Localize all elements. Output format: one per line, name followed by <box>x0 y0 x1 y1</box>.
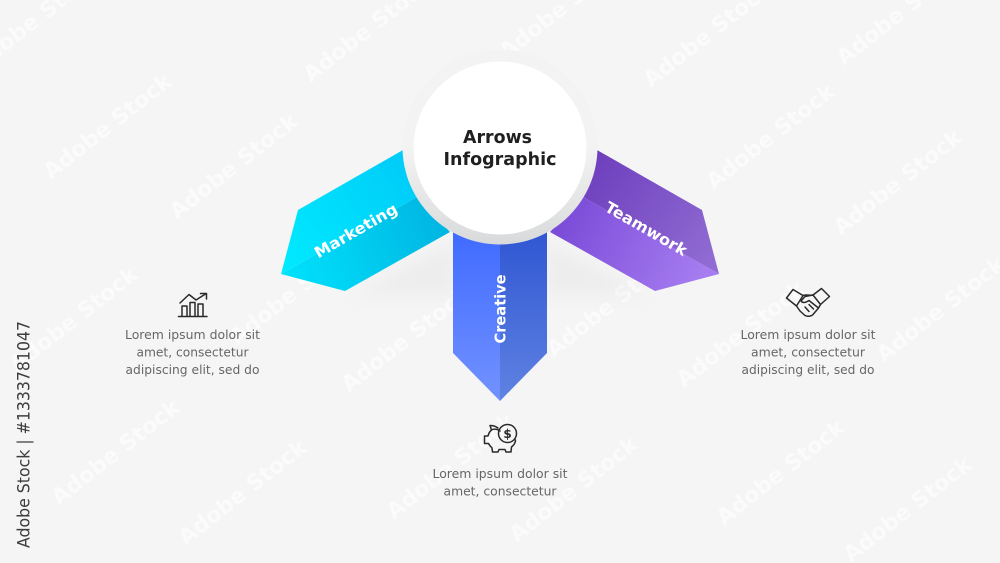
text: Marketing description <box>125 328 260 377</box>
text: Teamwork description: Lorem ipsum dolor sit <box>740 328 876 342</box>
watermark pattern: Adobe Stock <box>5 261 144 378</box>
watermark pattern: Adobe Stock <box>165 108 304 225</box>
icon: handshake <box>786 288 830 316</box>
watermark pattern: Adobe Stock <box>39 68 178 185</box>
text: Teamwork description: adipiscing elit, sed do <box>742 363 874 377</box>
watermark pattern: Adobe Stock <box>382 408 521 525</box>
watermark pattern: Adobe Stock <box>337 281 476 398</box>
label: Marketing: Marketing <box>311 200 401 262</box>
text: Teamwork description: amet, consectetur <box>751 346 865 360</box>
stock id label: Adobe Stock | #1333781047 <box>14 321 34 548</box>
arrow: Teamwork <box>550 150 719 291</box>
arrow shadows <box>350 240 650 296</box>
text: Creative description: amet, consectetur <box>444 484 557 498</box>
arrow: Creative <box>453 225 547 401</box>
label: Teamwork: Teamwork <box>602 198 691 260</box>
watermark pattern: Adobe Stock <box>702 78 841 195</box>
watermark pattern: Adobe Stock <box>712 414 851 531</box>
watermark pattern: Adobe Stock <box>505 431 644 548</box>
text: Marketing description: adipiscing elit, sed do <box>126 363 260 377</box>
icon: bar chart with rising arrow <box>178 294 207 316</box>
title: Infographic <box>444 149 556 170</box>
icon: piggy bank with coin <box>484 424 516 452</box>
text: Marketing description: amet, consectetur <box>136 346 249 360</box>
text: Marketing description: Lorem ipsum dolor sit <box>125 328 260 342</box>
arrow: Marketing <box>281 150 450 291</box>
label: Creative: Creative <box>492 274 510 344</box>
watermark pattern: Adobe Stock <box>672 276 811 393</box>
icon: piggy bank with coin: $ <box>503 427 512 441</box>
watermark pattern: Adobe Stock <box>47 394 186 511</box>
watermark pattern: Adobe Stock <box>174 434 313 551</box>
text: Creative description: Lorem ipsum dolor sit <box>432 467 568 481</box>
watermark pattern: Adobe Stock <box>542 246 681 363</box>
text: Teamwork description <box>740 328 876 377</box>
title: Arrows <box>463 127 532 148</box>
watermark pattern: Adobe Stock <box>225 234 364 351</box>
center circle <box>402 50 598 244</box>
title <box>444 127 556 170</box>
text: Creative description <box>432 467 568 498</box>
watermark pattern: Adobe Stock <box>829 124 968 241</box>
